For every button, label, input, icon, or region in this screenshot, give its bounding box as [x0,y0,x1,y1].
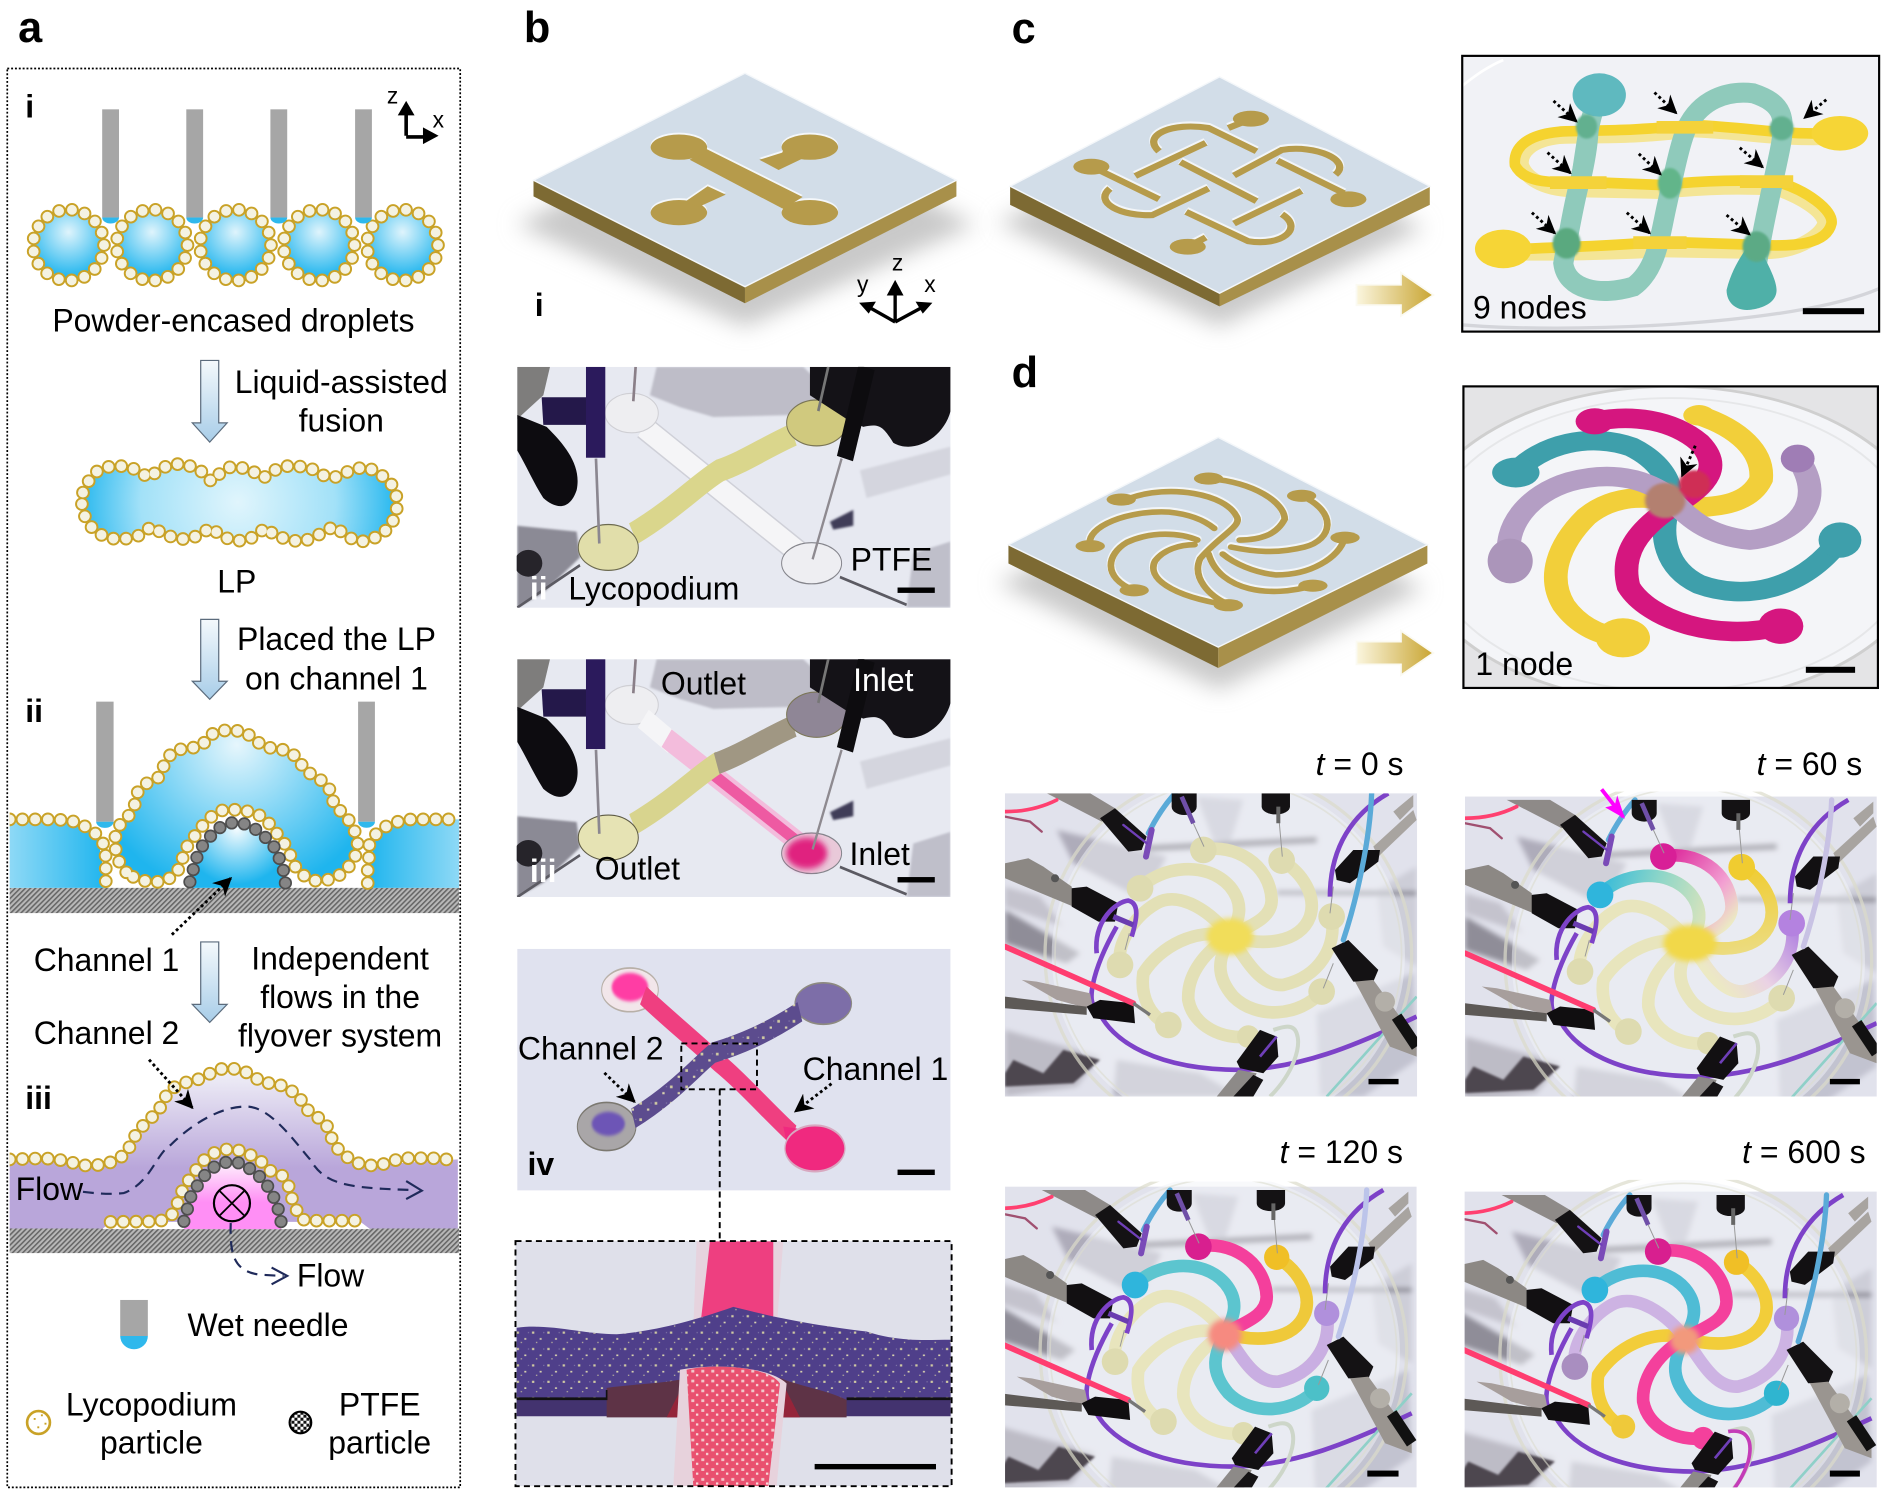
scale bar t=600 [1830,1471,1860,1477]
photo labels: iv, channel 1, channel 2, scale bar, arrows [518,1031,948,1182]
enlarged crossing photo [513,1239,953,1490]
legend: wet needle [120,1300,348,1349]
dashed zoom box and connector [681,1043,757,1241]
text: liquid-assisted fusion: Liquid-assisted [235,364,448,400]
label: 9 nodes: 9 nodes [1473,289,1587,325]
axes: z and x: x [433,106,445,132]
photo labels: iii, inlet, outlet, scale bar: Outlet [661,665,746,701]
photo labels: iii, inlet, outlet, scale bar: Inlet [849,836,910,872]
arrow: placement step [192,619,227,699]
dotted arrow: channel 1 [172,878,231,935]
arrow: flow step [192,942,227,1022]
axes: x y z: z [892,249,903,275]
photo labels: iv, channel 1, channel 2, scale bar, arrows: iv [528,1146,554,1182]
plate c: 9-node knot channel [997,77,1430,327]
step i: powder-encased droplets with needles: i [25,89,34,125]
panel label c: c [1012,5,1036,53]
legend: PTFE particle [290,1386,431,1461]
text: independent flows: Independent [251,941,429,977]
caption: powder-encased droplets: Powder-encased droplets [52,303,415,339]
legend: PTFE particle: particle [328,1425,431,1461]
flow arrow out of plane [231,1223,287,1284]
time label t=60: t = 60 s [1757,746,1862,782]
text: independent flows: flows in the [260,979,420,1015]
photo c: 9 nodes [1457,55,1884,335]
photo labels: iii, inlet, outlet, scale bar: Inlet [853,662,914,698]
time label t=120: t = 120 s [1280,1134,1403,1170]
panel label a: a [18,4,43,52]
label: i: i [535,287,544,323]
photo d frame, label, arrow, scale: 1 node [1475,646,1573,682]
time label t=600: t = 600 s [1742,1134,1866,1170]
axes: z and x [387,82,445,144]
label: flow 2: Flow [297,1258,365,1294]
legend: lycopodium particle: Lycopodium [66,1386,237,1422]
axes: z and x: z [387,82,398,108]
legend: lycopodium particle: particle [100,1425,203,1461]
plate b-i: dumbbell channels [517,73,976,327]
text: placed the LP on channel 1: Placed the LP [237,621,436,657]
step ii: LP over channel 1 [10,693,459,913]
node arrows: 9 dotted arrows [1532,93,1826,234]
scale bar t=0 [1369,1079,1399,1084]
arrow: c to photo [1356,273,1433,316]
panel label b: b [524,4,550,52]
photo b-iv: crossing channels top view [517,949,951,1191]
plate d: spiral channels [997,437,1427,690]
photo t=60 s [1465,792,1877,1096]
arrow: fusion step [192,360,227,442]
photo labels: iii, inlet, outlet, scale bar: Outlet [595,850,680,886]
photo b-iii: flows in channels [514,659,951,897]
legend: wet needle: Wet needle [187,1307,348,1343]
legend: lycopodium particle [27,1386,237,1461]
label: channel 2: Channel 2 [34,1015,179,1051]
time label t=0: t = 0 s [1316,746,1404,782]
legend: PTFE particle: PTFE [339,1386,421,1422]
panel label d: d [1012,349,1038,397]
label: flow: Flow [16,1171,84,1207]
text: independent flows: flyover system [238,1017,442,1053]
arrow: d to photo [1356,631,1433,675]
liquid plasticine blob LP [82,464,398,542]
dotted arrow: channel 2 [149,1060,192,1108]
photo labels: iii, inlet, outlet, scale bar [530,662,935,889]
photo c frame [1462,56,1879,332]
label: channel 1: Channel 1 [34,942,179,978]
axes: x y z: x [924,271,936,297]
caption: LP: LP [217,563,256,599]
photo labels: ii, lycopodium, PTFE, scale bar [530,542,935,607]
step i: powder-encased droplets with needles [25,89,438,281]
photo d: 1 node [1464,388,1877,687]
scale bar t=120 [1367,1471,1399,1477]
photo labels: iv, channel 1, channel 2, scale bar, arrows: Channel 1 [803,1051,948,1087]
text: liquid-assisted fusion: fusion [299,402,384,438]
axes: x y z: y [857,271,869,297]
photo labels: ii, lycopodium, PTFE, scale bar: PTFE [851,542,932,578]
photo t=600 s [1455,1173,1884,1497]
step iii: flyover cross-section [10,1068,459,1253]
photo t=0 s [1004,793,1418,1096]
scale bar c [1803,308,1864,314]
photo t=120 s [1005,1182,1416,1488]
magenta arrow and scale bar t=60 [1602,789,1860,1084]
photo labels: iii, inlet, outlet, scale bar: iii [530,853,557,889]
photo labels: iv, channel 1, channel 2, scale bar, arrows: Channel 2 [518,1031,663,1067]
text: placed the LP on channel 1: on channel 1 [245,661,428,697]
axes: x y z [857,249,936,322]
photo labels: ii, lycopodium, PTFE, scale bar: ii [530,571,548,607]
step ii: LP over channel 1: ii [25,693,43,729]
panel a: dotted frame [7,68,460,1487]
photo d frame, label, arrow, scale [1463,386,1878,688]
photo b-ii: lycopodium and PTFE channels [514,367,951,608]
photo labels: ii, lycopodium, PTFE, scale bar: Lycopodium [568,571,739,607]
step iii: flyover cross-section: iii [25,1080,52,1116]
